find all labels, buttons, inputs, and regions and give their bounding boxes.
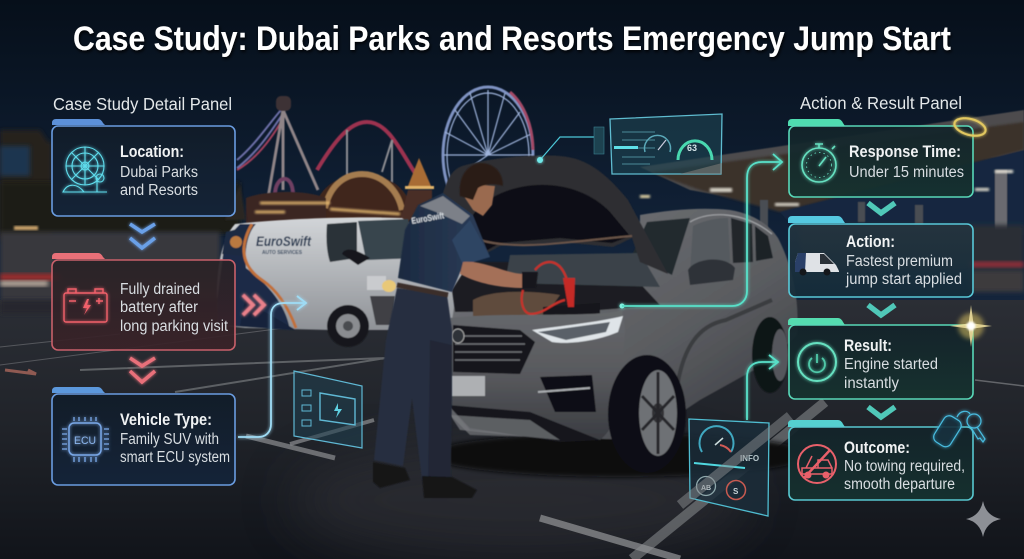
text: outcome: smooth departure bbox=[844, 476, 955, 493]
bottom gauge hologram: INFO bbox=[740, 454, 759, 463]
panel: outcome bbox=[788, 420, 973, 500]
text: result bbox=[844, 337, 938, 392]
panel: drained battery bbox=[52, 253, 235, 350]
text: outcome: Outcome: bbox=[844, 439, 910, 457]
icon: ECU chip: ECU bbox=[74, 435, 96, 447]
text: battery bbox=[120, 281, 229, 335]
arrow: teal chevron bbox=[868, 305, 895, 315]
arrow: teal chevron bbox=[868, 203, 895, 213]
hood bbox=[443, 155, 668, 274]
panel: location bbox=[52, 119, 235, 216]
icon: no towing bbox=[798, 445, 836, 483]
service van: EuroSwift bbox=[256, 233, 312, 249]
panel: vehicle type bbox=[52, 387, 235, 485]
panel: response time bbox=[788, 119, 973, 197]
connector: vehicle type to van bbox=[238, 296, 306, 437]
text: result: instantly bbox=[844, 375, 899, 392]
text: result: Engine started bbox=[844, 356, 938, 373]
text: vehicle type: Family SUV with bbox=[120, 431, 219, 448]
text: response time: Under 15 minutes bbox=[849, 164, 964, 181]
arrow: teal chevron bbox=[868, 407, 895, 417]
text: action bbox=[845, 233, 962, 288]
text: location: Location: bbox=[120, 143, 184, 161]
engine bay bbox=[452, 262, 660, 312]
service van bbox=[217, 217, 472, 347]
text: response time bbox=[849, 143, 964, 181]
panel: result bbox=[788, 318, 973, 399]
text: battery: long parking visit bbox=[120, 318, 229, 335]
heading: action and result panel: Action & Result Panel bbox=[800, 93, 962, 113]
text: response time: Response Time: bbox=[849, 143, 961, 161]
connector: engine to response time bbox=[620, 154, 782, 308]
icon: light flare bbox=[950, 305, 992, 347]
icon: small van bbox=[795, 253, 839, 276]
bottom gauge hologram bbox=[680, 416, 790, 516]
dome bbox=[315, 174, 411, 250]
service van: AUTO SERVICES bbox=[262, 250, 302, 256]
text: battery: battery after bbox=[120, 299, 198, 316]
heading: case study detail panel: Case Study Detail Panel bbox=[53, 94, 232, 114]
text: vehicle type: Vehicle Type: bbox=[120, 411, 212, 429]
canopy and parking structure bbox=[640, 110, 1024, 292]
panel: action bbox=[788, 216, 973, 297]
text: outcome bbox=[844, 439, 965, 493]
text: vehicle type: smart ECU system bbox=[120, 449, 230, 466]
icon: car keys bbox=[931, 411, 985, 449]
amusement park rides bbox=[225, 87, 533, 250]
icon: golden halo bbox=[952, 115, 988, 139]
text: location: and Resorts bbox=[120, 182, 198, 199]
icon: battery bbox=[64, 289, 107, 322]
arrow: down chevrons red bbox=[130, 358, 155, 382]
text: action: jump start applied bbox=[845, 271, 962, 288]
icon: sparkle watermark bbox=[966, 501, 1001, 537]
text: location: Dubai Parks bbox=[120, 164, 198, 181]
icon: ECU chip bbox=[62, 417, 109, 462]
bottom gauge hologram: S bbox=[733, 487, 739, 496]
front fascia bbox=[448, 310, 625, 440]
arrow: down chevrons blue bbox=[130, 224, 155, 248]
rear wheel bbox=[752, 317, 788, 393]
text: battery: Fully drained bbox=[120, 281, 200, 298]
connector: gauge to result bbox=[747, 355, 778, 420]
dashboard hologram top bbox=[537, 114, 722, 174]
text: action: Fastest premium bbox=[846, 253, 953, 270]
text: action: Action: bbox=[846, 233, 895, 251]
text: result: Result: bbox=[844, 337, 892, 355]
parking lot markings bbox=[0, 322, 1024, 559]
mechanic bbox=[373, 163, 538, 498]
icon: stopwatch bbox=[802, 144, 836, 182]
front wheel bbox=[608, 355, 686, 473]
text: outcome: No towing required, bbox=[844, 458, 965, 475]
mechanic: EuroSwift bbox=[411, 210, 445, 226]
SUV with open hood bbox=[430, 155, 810, 477]
text: location bbox=[120, 143, 198, 199]
text: vehicle type bbox=[120, 411, 230, 466]
battery hologram bbox=[294, 371, 362, 448]
ferris wheel bbox=[443, 87, 533, 223]
dashboard hologram top: 63 bbox=[687, 143, 697, 153]
icon: power button bbox=[798, 343, 836, 381]
icon: ferris wheel bbox=[63, 147, 107, 192]
bottom gauge hologram: AB bbox=[701, 485, 711, 492]
